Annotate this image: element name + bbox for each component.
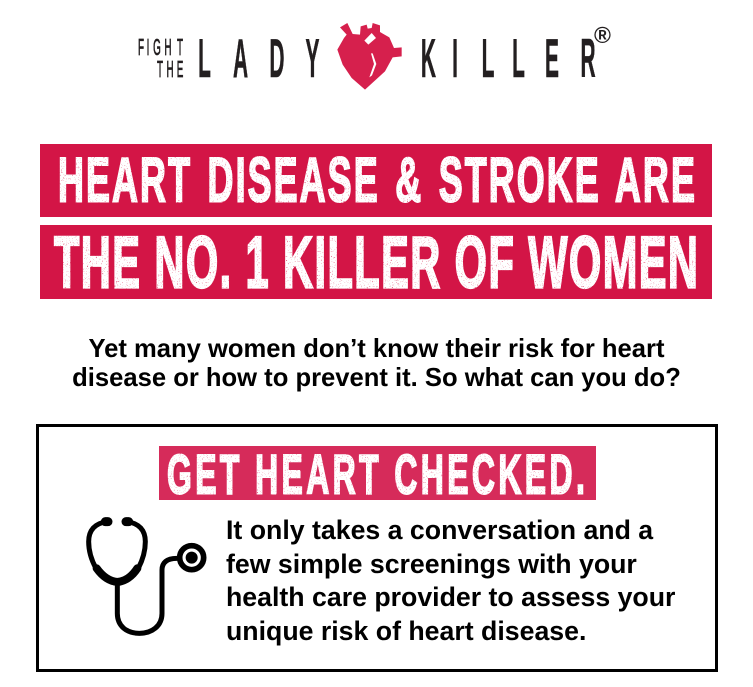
text block: screening description: health care provider to assess your — [226, 582, 675, 612]
text block: intro — [72, 335, 681, 392]
logo: Fight the Lady Killer — [138, 22, 611, 89]
text block: intro: Yet many women don’t know their risk for heart — [88, 335, 664, 363]
icon: stethoscope — [89, 522, 204, 633]
text block: intro: disease or how to prevent it. So what can you do? — [72, 364, 681, 392]
heading: get heart checked: GET HEART CHECKED. — [167, 443, 585, 506]
registered mark: ® — [594, 22, 611, 48]
icon: anatomical heart — [337, 23, 402, 90]
text block: screening description — [226, 515, 675, 646]
panel: get heart checked — [38, 426, 716, 670]
text block: screening description: few simple screenings with your — [226, 549, 637, 579]
text block: screening description: unique risk of heart disease. — [226, 616, 586, 646]
banner: heart disease and stroke are: HEART DISEASE & STROKE ARE — [58, 145, 697, 215]
banner: the no. 1 killer of women: THE NO. 1 KILLER OF WOMEN — [54, 221, 698, 303]
text block: screening description: It only takes a conversation and a — [226, 515, 653, 545]
logo text: lady: LADY — [198, 27, 320, 89]
logo text: fight the — [138, 34, 183, 82]
logo text: killer: KILLER — [421, 27, 596, 89]
logo text: fight the: FIGHT — [138, 34, 183, 60]
logo text: fight the: THE — [157, 56, 183, 82]
